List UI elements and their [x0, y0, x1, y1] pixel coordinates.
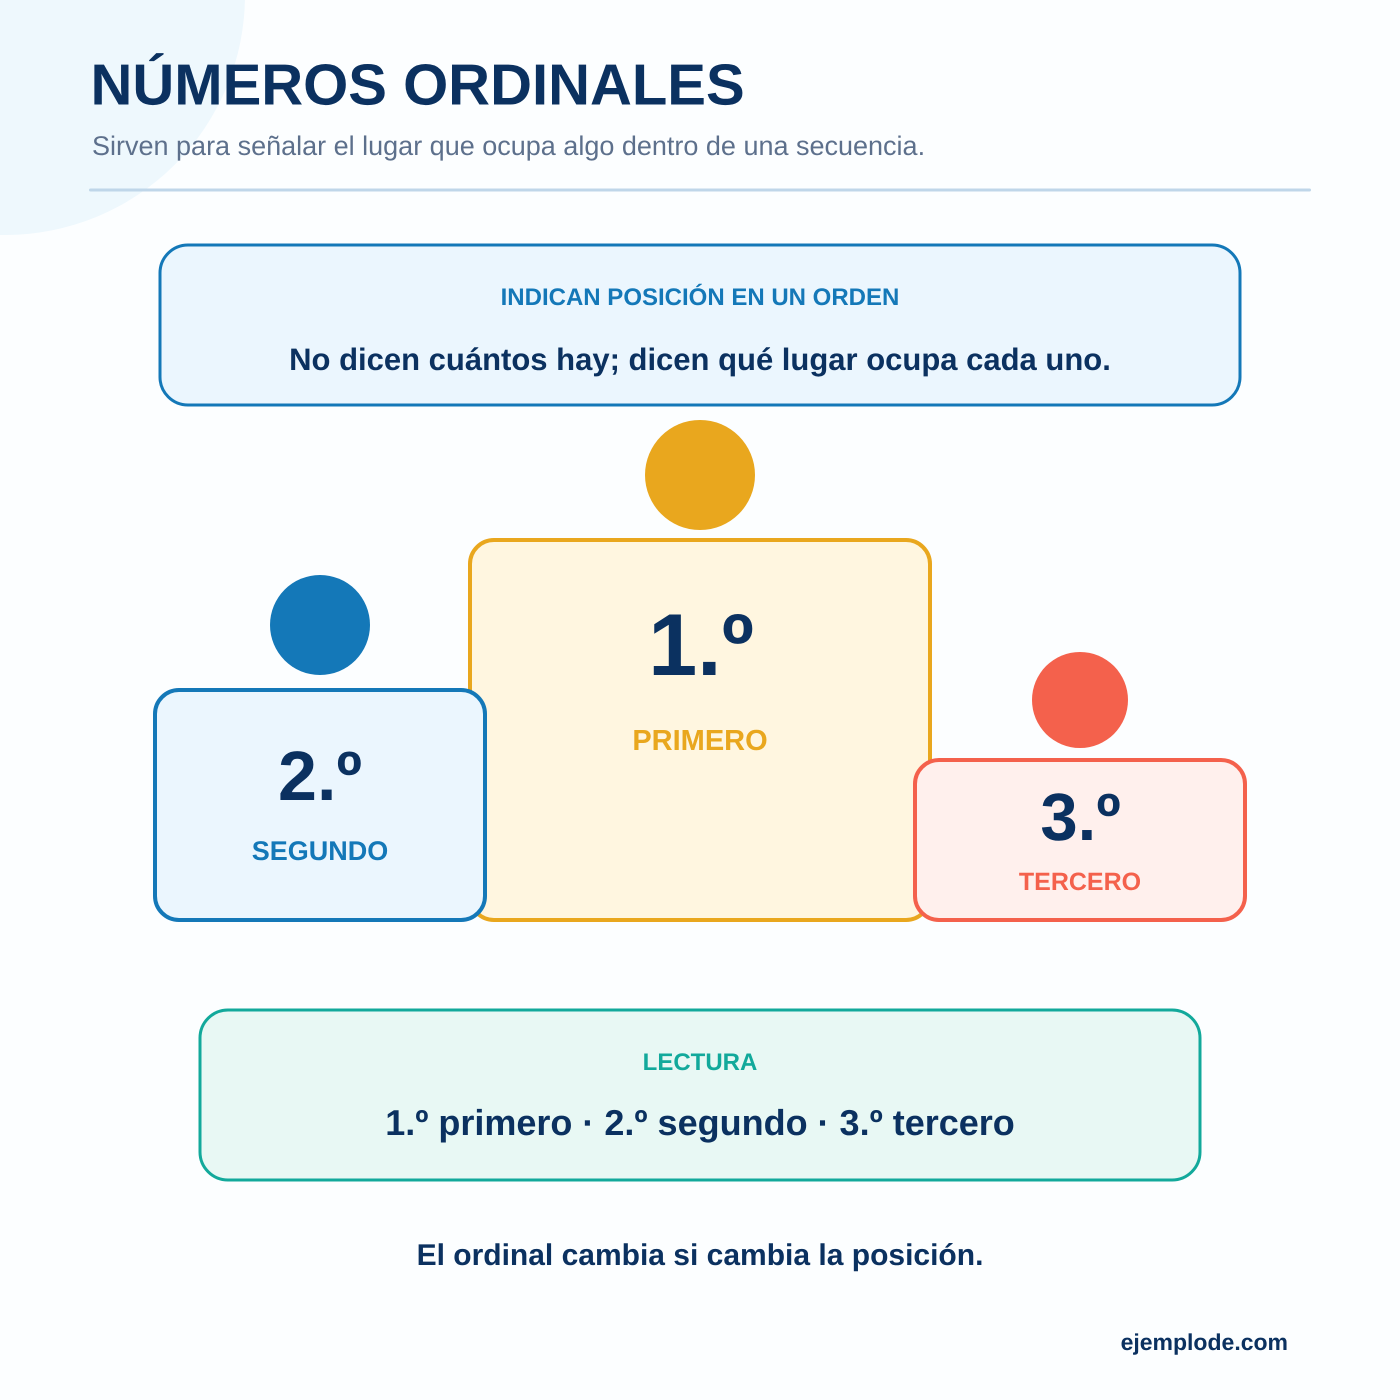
ordinal 2: 2.º [278, 737, 362, 815]
podium: third place [915, 652, 1245, 920]
label tercero: TERCERO [1019, 868, 1141, 896]
definition text: No dicen cuántos hay; dicen qué lugar ocupa cada uno. [289, 342, 1111, 377]
panel: reading [200, 1010, 1200, 1180]
label segundo: SEGUNDO [252, 836, 388, 866]
icon: blue circle [270, 575, 370, 675]
ordinal 3: 3.º [1040, 780, 1121, 855]
closing statement: El ordinal cambia si cambia la posición. [417, 1239, 983, 1272]
podium: first place [470, 420, 930, 920]
title: NÚMEROS ORDINALES [90, 52, 745, 118]
source: ejemplode.com [1121, 1329, 1288, 1355]
reading label: LECTURA [643, 1049, 757, 1076]
label primero: PRIMERO [632, 725, 768, 757]
icon: coral circle [1032, 652, 1128, 748]
reading text: 1.º primero · 2.º segundo · 3.º tercero [385, 1102, 1015, 1143]
panel: definition [160, 245, 1240, 405]
ordinal 1: 1.º [648, 595, 754, 694]
definition label: INDICAN POSICIÓN EN UN ORDEN [501, 283, 899, 311]
podium: second place [155, 575, 485, 920]
icon: gold circle [645, 420, 755, 530]
subtitle: Sirven para señalar el lugar que ocupa algo dentro de una secuencia. [92, 131, 925, 161]
